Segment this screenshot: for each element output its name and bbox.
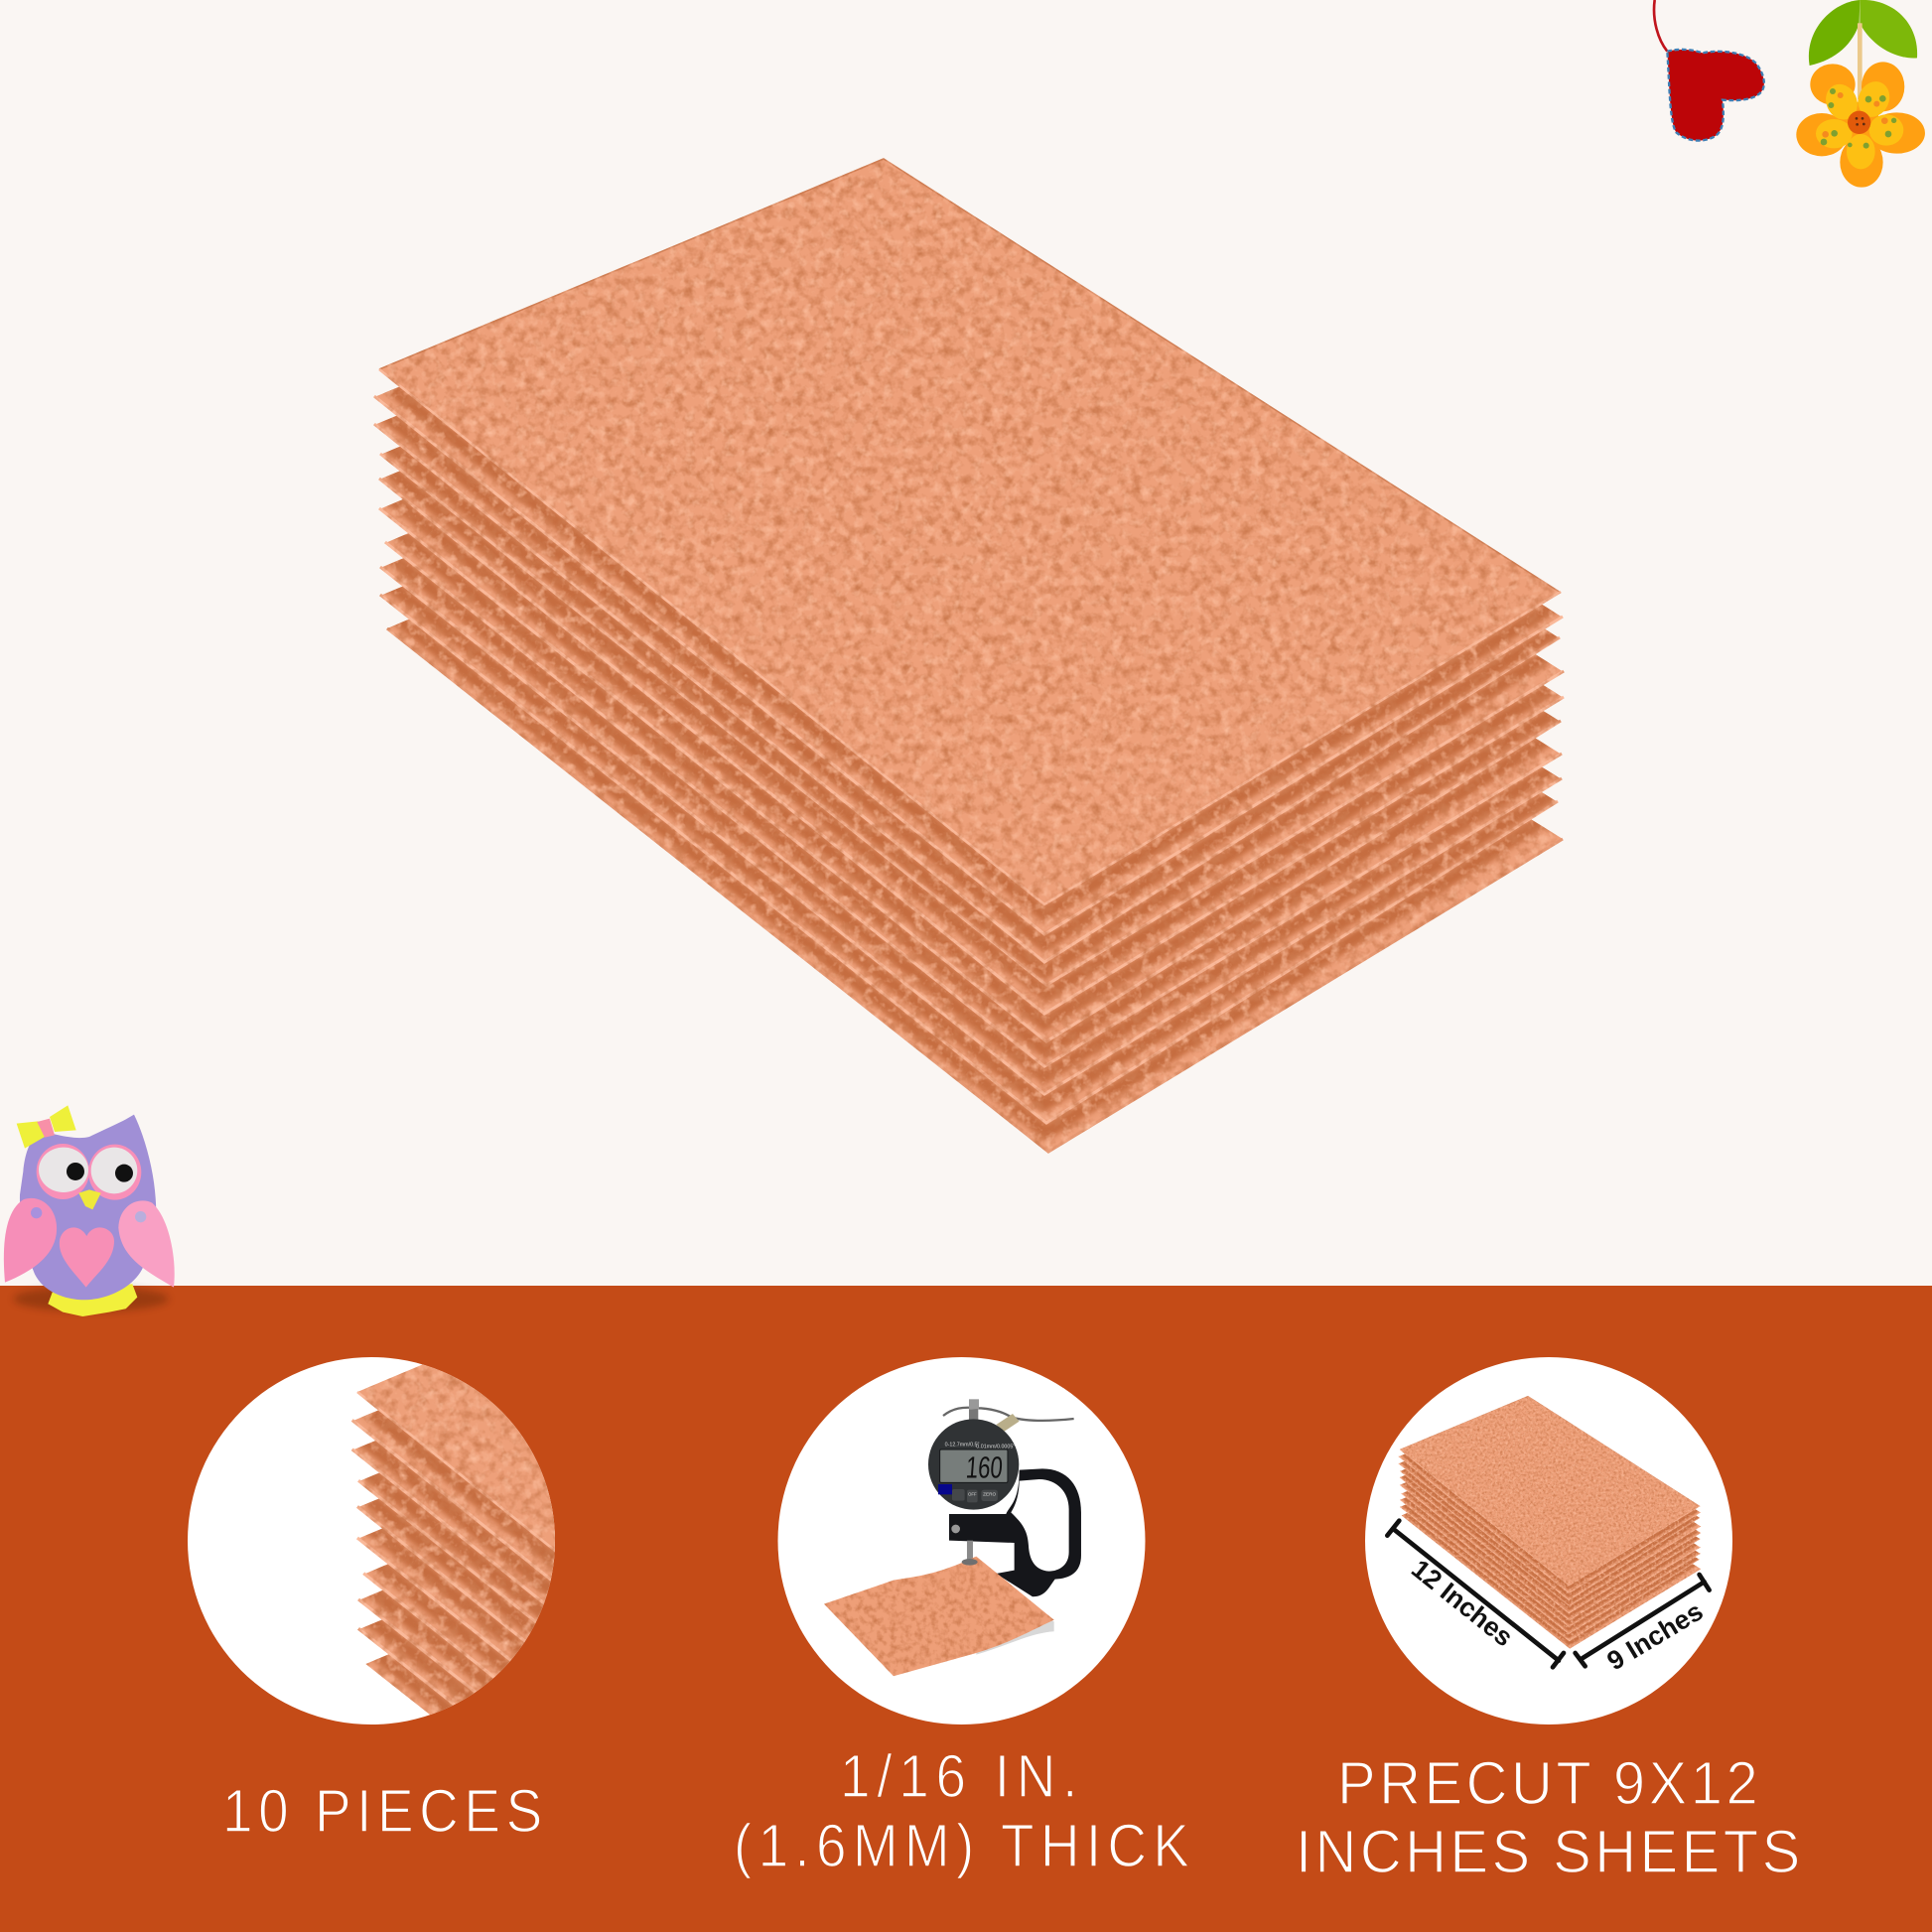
- caption: 10 pieces: 10 PIECES: [222, 1777, 542, 1846]
- panel: thickness gauge circle: 0.01mm/0.0005": [976, 1444, 1015, 1449]
- decoration: felt owl: [4, 1105, 175, 1316]
- panel: 10 pieces circle: [188, 1357, 555, 1725]
- dimension: 12 inches: 12 Inches: [1406, 1554, 1519, 1652]
- caption: thickness: (1.6MM) THICK: [734, 1812, 1189, 1880]
- decoration: orange felt flower: [1796, 0, 1925, 188]
- panel: thickness gauge circle: OFF: [968, 1492, 977, 1497]
- decoration: red felt heart: [1654, 0, 1764, 141]
- panel: sheet dimensions circle: [1365, 1357, 1732, 1725]
- panel: thickness gauge circle: 0-12.7mm/0.5": [945, 1443, 980, 1449]
- dimension: 9 inches: [1576, 1575, 1710, 1676]
- main felt sheet stack: [374, 159, 1564, 1152]
- caption: sheet size: INCHES SHEETS: [1296, 1818, 1800, 1885]
- panel: thickness gauge circle: 160: [965, 1450, 1004, 1484]
- caption: thickness: 1/16 IN.: [840, 1742, 1077, 1811]
- panel: thickness gauge circle: ZERO: [983, 1492, 996, 1497]
- caption: sheet size: [1296, 1749, 1800, 1885]
- caption: sheet size: PRECUT 9X12: [1337, 1749, 1758, 1817]
- dimension: 12 inches: [1387, 1521, 1564, 1667]
- panel: thickness gauge circle: [778, 1357, 1146, 1725]
- bottom orange band: [0, 1286, 1932, 1932]
- caption: thickness: [734, 1742, 1189, 1880]
- dimension: 9 inches: 9 Inches: [1602, 1596, 1708, 1676]
